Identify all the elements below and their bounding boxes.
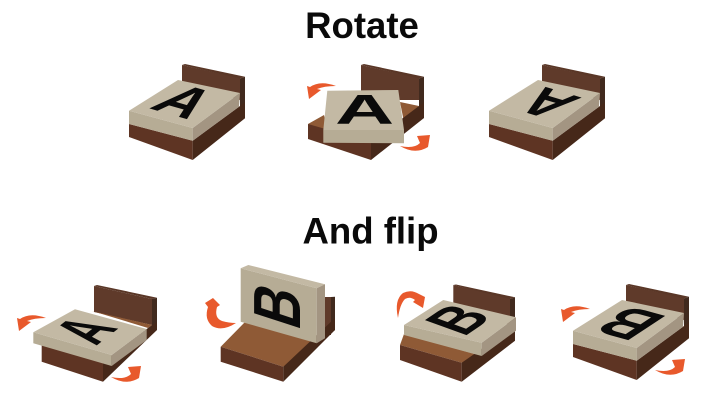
bed 2: mattress rotating: [308, 64, 424, 160]
arrow: bed 7 left: [561, 306, 590, 322]
bed 2: mattress rotating: A: [335, 86, 394, 133]
bed 5: mattress standing upright with B: B: [241, 275, 315, 337]
arrow: bed 5 flip: [205, 298, 236, 328]
arrow: bed 2 left: [307, 83, 336, 99]
arrow: bed 6 flip: [397, 291, 425, 318]
bed 4: mattress turned sideways with A: A: [37, 310, 133, 350]
bed 6: mattress lifted with B: [400, 284, 516, 382]
bed 7: flipped and rotated B: [573, 284, 689, 380]
bed 6: mattress lifted with B: B: [410, 297, 508, 342]
bed 3: letter A rotated 180 degrees: [489, 64, 605, 160]
bed 5: mattress standing upright with B: [221, 265, 335, 382]
arrow: bed 2 right: [400, 135, 430, 151]
arrow: bed 7 right: [655, 359, 685, 375]
arrow: bed 4 right: [111, 366, 141, 382]
bed 1: letter A on mattress: [129, 64, 245, 160]
title: Rotate: Rotate: [305, 5, 419, 46]
heading: And flip: And flip: [302, 210, 439, 252]
arrow: bed 4 left: [17, 315, 46, 331]
bed 1: letter A on mattress: A: [138, 76, 230, 128]
bed 3: letter A rotated 180 degrees: A: [502, 80, 593, 127]
bed 7: flipped and rotated B: B: [580, 298, 681, 348]
bed 4: mattress turned sideways with A: [33, 285, 157, 382]
